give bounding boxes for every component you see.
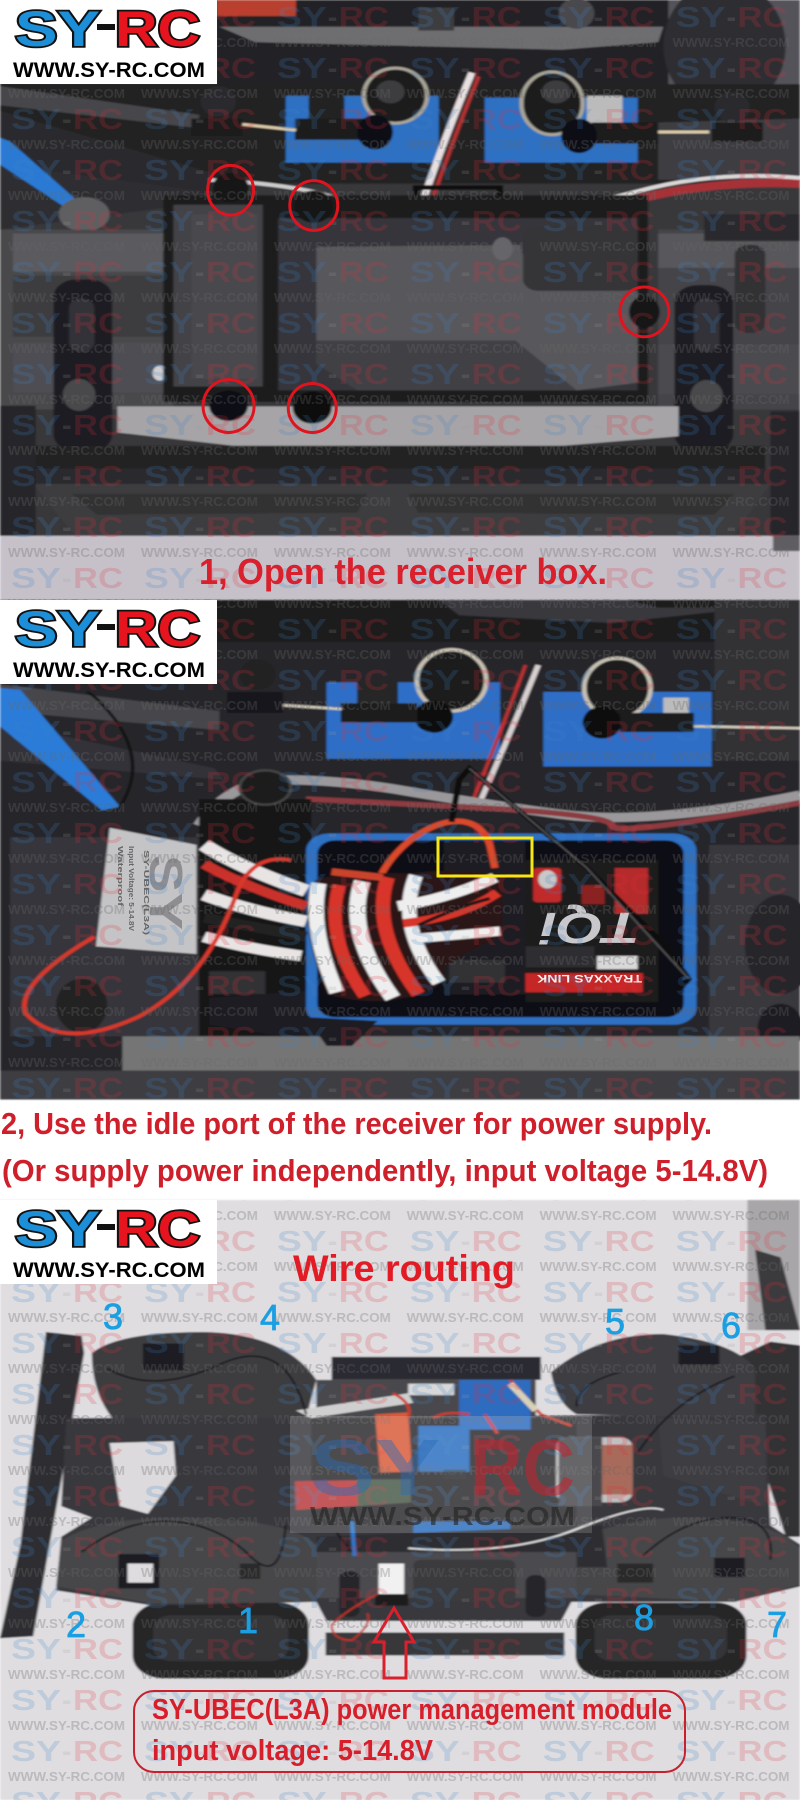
position numbers 1 to 8: 1 <box>238 1600 258 1641</box>
position numbers 1 to 8: 2 <box>66 1604 86 1645</box>
receiver label text: TRAXXAS LINK <box>537 972 642 984</box>
position numbers 1 to 8 <box>66 1296 787 1645</box>
text: step 2 white strip: (Or supply power independently, input voltage 5-14.8V) <box>2 1153 768 1188</box>
logo: panel 3: WWW.SY-RC.COM <box>13 1259 205 1282</box>
panel: step 1 receiver box photo <box>0 0 800 600</box>
large centre watermark <box>290 1416 592 1533</box>
module label: Waterproof <box>116 846 125 907</box>
callout: yellow idle port box <box>438 838 532 876</box>
fenders <box>92 1332 316 1418</box>
windows <box>110 1441 176 1514</box>
callout: module description: SY-UBEC(L3A) power management module <box>152 1694 672 1726</box>
large centre watermark: WWW.SY-RC.COM <box>310 1501 575 1531</box>
position numbers 1 to 8: 4 <box>260 1297 280 1338</box>
callout: module description <box>134 1691 685 1772</box>
wires from module to bundle <box>204 845 306 891</box>
screw heads <box>213 173 248 202</box>
logo: top panel 1: RC <box>115 1 200 57</box>
position numbers 1 to 8: 7 <box>767 1604 787 1645</box>
module label: Input Voltage: 5-14.8V <box>127 846 136 931</box>
logo: top panel 1 <box>0 0 217 84</box>
position numbers 1 to 8: 5 <box>605 1301 625 1342</box>
logo: panel 2 <box>0 600 217 684</box>
chassis sides <box>0 230 173 409</box>
receiver box <box>163 195 648 402</box>
large centre watermark: SY <box>310 1423 440 1512</box>
position numbers 1 to 8: 6 <box>721 1305 741 1346</box>
logo: top panel 1: SY <box>15 1 100 57</box>
bumper <box>0 1332 84 1638</box>
logo: panel 2: SY <box>15 601 100 657</box>
servos <box>286 96 439 163</box>
wheels <box>133 1603 309 1678</box>
receiver TQi mark: TQi <box>539 903 640 952</box>
position numbers 1 to 8: 3 <box>103 1296 123 1337</box>
receiver box with blue seal <box>306 833 696 1025</box>
white servo cable band <box>199 780 800 826</box>
callouts: five red screw circles <box>203 165 669 432</box>
heading: wire routing: Wire routing <box>293 1248 515 1289</box>
large centre watermark: - <box>440 1423 470 1512</box>
text: step 2 white strip <box>1 1106 768 1188</box>
logo: panel 2: RC <box>115 601 200 657</box>
callout: module description: input voltage: 5-14.8V <box>152 1735 434 1767</box>
logo: panel 3 <box>0 1200 217 1284</box>
panel: wire routing chassis photo <box>0 1200 800 1800</box>
logo: panel 3: RC <box>115 1201 200 1257</box>
skid bar <box>117 406 679 446</box>
wires across <box>209 180 418 214</box>
module SY mark: SY <box>140 855 192 930</box>
logo: top panel 1: WWW.SY-RC.COM <box>13 59 205 82</box>
chassis <box>56 1414 800 1621</box>
heading: step 1: 1, Open the receiver box. <box>199 551 607 592</box>
logo: panel 2: WWW.SY-RC.COM <box>13 659 205 682</box>
module label: SY-UBEC(L3A) <box>142 850 151 936</box>
module <box>379 1564 404 1594</box>
text: step 2 white strip: 2, Use the idle port of the receiver for power supply. <box>1 1106 712 1141</box>
arrow pointing to module <box>374 1608 414 1678</box>
receiver label <box>533 868 561 902</box>
top bar and center <box>332 1357 541 1380</box>
logo: panel 3: SY <box>15 1201 100 1257</box>
panel: step 2 receiver wiring photo <box>0 600 800 1099</box>
large centre watermark: RC <box>470 1423 575 1512</box>
mount plate <box>10 837 199 1036</box>
module label <box>116 846 151 936</box>
SY module <box>96 828 196 954</box>
position numbers 1 to 8: 8 <box>634 1597 654 1638</box>
wire bundle <box>307 871 503 1001</box>
bottom band <box>122 1036 800 1071</box>
